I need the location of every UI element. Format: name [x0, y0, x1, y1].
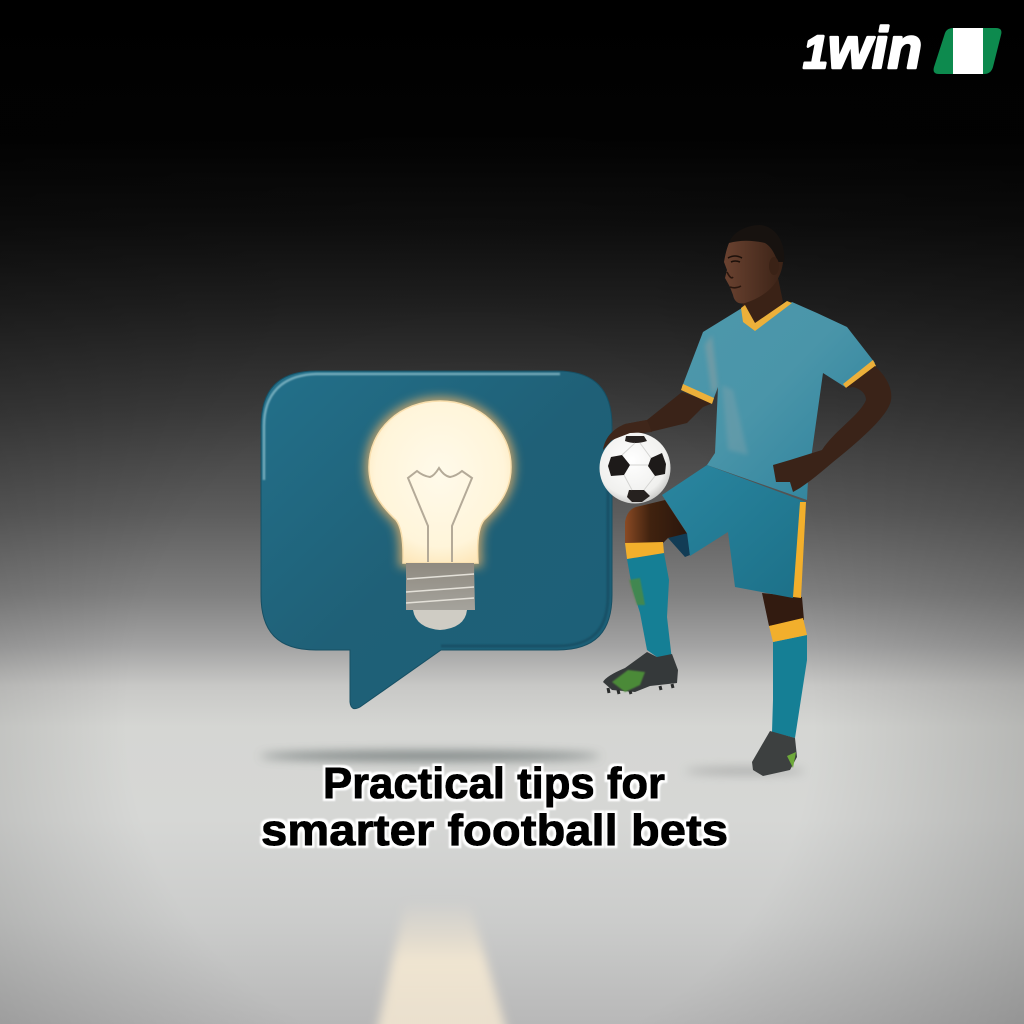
bulb filament: [408, 468, 472, 562]
standing leg skin: [762, 593, 804, 626]
standing foot boot: [752, 731, 797, 776]
jersey collar: [741, 301, 792, 331]
bubble floor shadow: [260, 751, 600, 761]
logo wordmark: 1win: [803, 16, 922, 81]
bubble lower bevel: [441, 470, 608, 646]
title line 2: smarter football bets: [261, 806, 728, 855]
bulb screw base: [406, 563, 475, 630]
raised leg knee: [625, 500, 688, 543]
bubble body: [261, 371, 612, 709]
title text: [261, 759, 728, 855]
right arm and hand: [773, 366, 891, 492]
light bulb: [369, 401, 511, 630]
player floor shadow: [685, 768, 805, 774]
logo: 1win with flag: [803, 16, 1001, 81]
bulb halo: [369, 401, 511, 563]
hand on ball: [603, 420, 652, 450]
raised foot boot: [603, 652, 678, 694]
bubble rim highlight: [264, 374, 560, 480]
floor light reflection: [368, 905, 518, 1024]
bulb glass: [369, 401, 511, 563]
eye and brow: [728, 256, 742, 262]
ear: [769, 257, 779, 275]
sock grass detail: [629, 578, 645, 605]
right sleeve trim: [843, 360, 876, 388]
head: [724, 225, 784, 303]
title line 1: Practical tips for: [323, 759, 665, 808]
neck: [742, 268, 783, 330]
football player: [600, 225, 891, 776]
nose and mouth: [727, 272, 741, 288]
soccer ball: [600, 432, 670, 504]
left arm: [625, 392, 713, 436]
standing leg sock: [772, 635, 807, 738]
left sleeve trim: [681, 384, 714, 404]
shorts: [662, 465, 806, 598]
icon: Nigerian flag: [934, 28, 1001, 74]
raised leg sock band: [625, 542, 664, 559]
jersey: [681, 301, 876, 500]
jersey fold highlights: [705, 335, 718, 395]
raised leg sock: [627, 553, 672, 660]
shorts stripe: [793, 502, 806, 598]
speech bubble: [261, 371, 612, 709]
hair: [729, 225, 784, 262]
standing leg sock band: [769, 618, 807, 642]
